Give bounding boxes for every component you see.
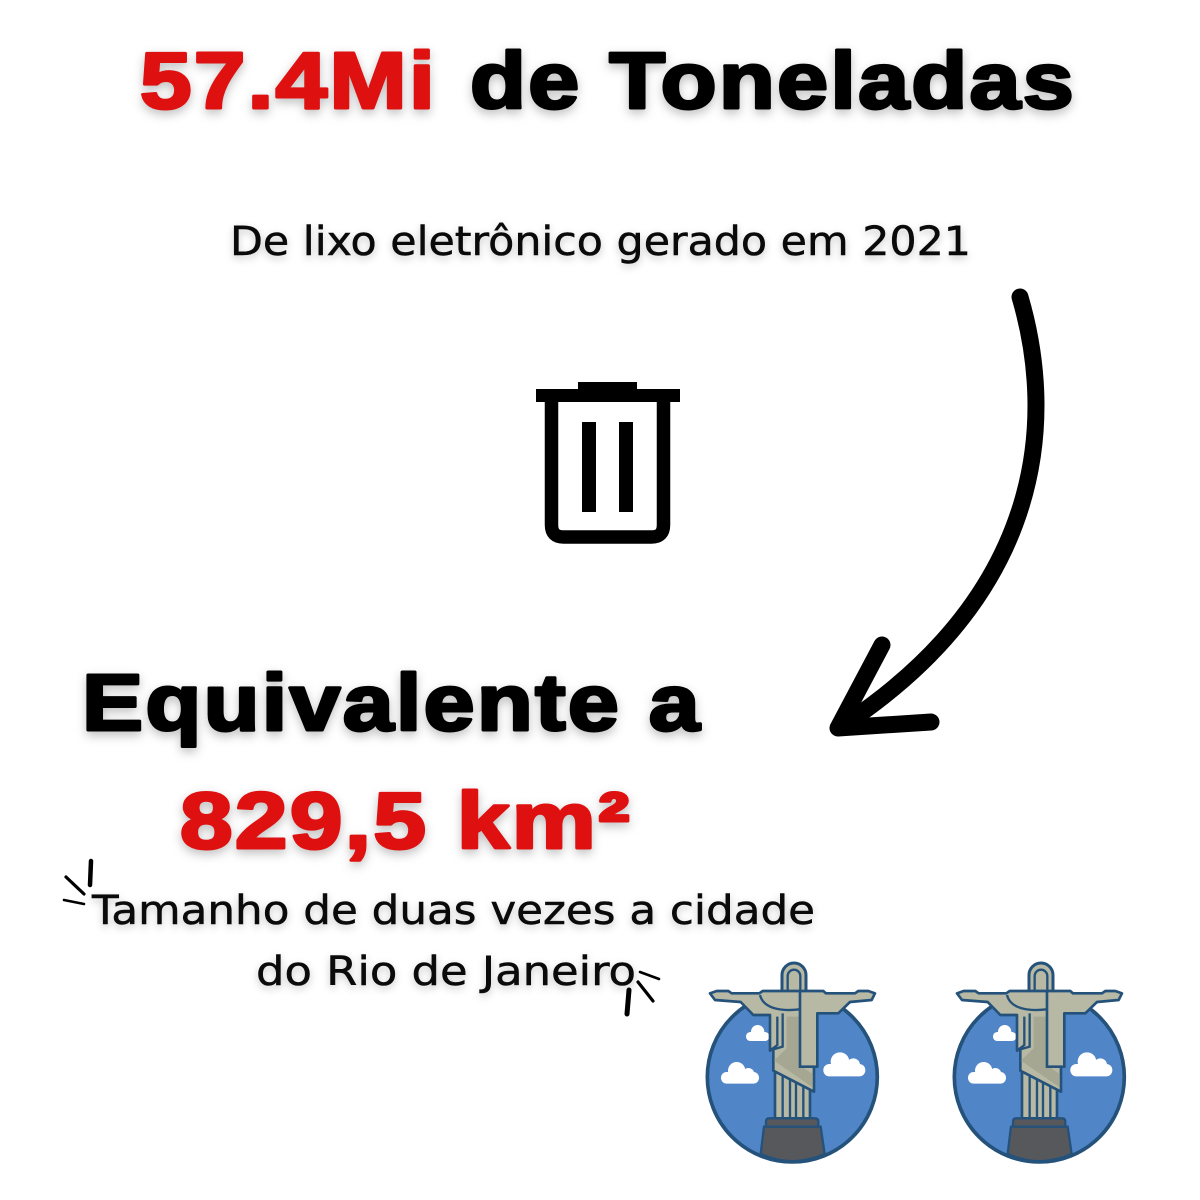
accent marks: bottom right	[627, 972, 659, 1014]
title: de Toneladas	[470, 36, 1076, 125]
title	[140, 36, 1076, 125]
comparison text: Tamanho de duas vezes a cidade	[91, 888, 815, 934]
icon: Christ the Redeemer 1	[707, 963, 877, 1162]
icon: Christ the Redeemer 2	[954, 963, 1124, 1162]
comparison text	[91, 888, 815, 995]
arrow	[838, 297, 1036, 728]
value: area: 829,5 km²	[180, 776, 632, 865]
icon: trash can	[536, 382, 680, 537]
heading: equivalente: Equivalente a	[82, 658, 702, 747]
subtitle: De lixo eletrônico gerado em 2021	[230, 219, 971, 265]
accent marks: top left	[64, 861, 91, 904]
comparison text: do Rio de Janeiro	[256, 949, 636, 995]
title: 57.4Mi	[140, 36, 437, 125]
